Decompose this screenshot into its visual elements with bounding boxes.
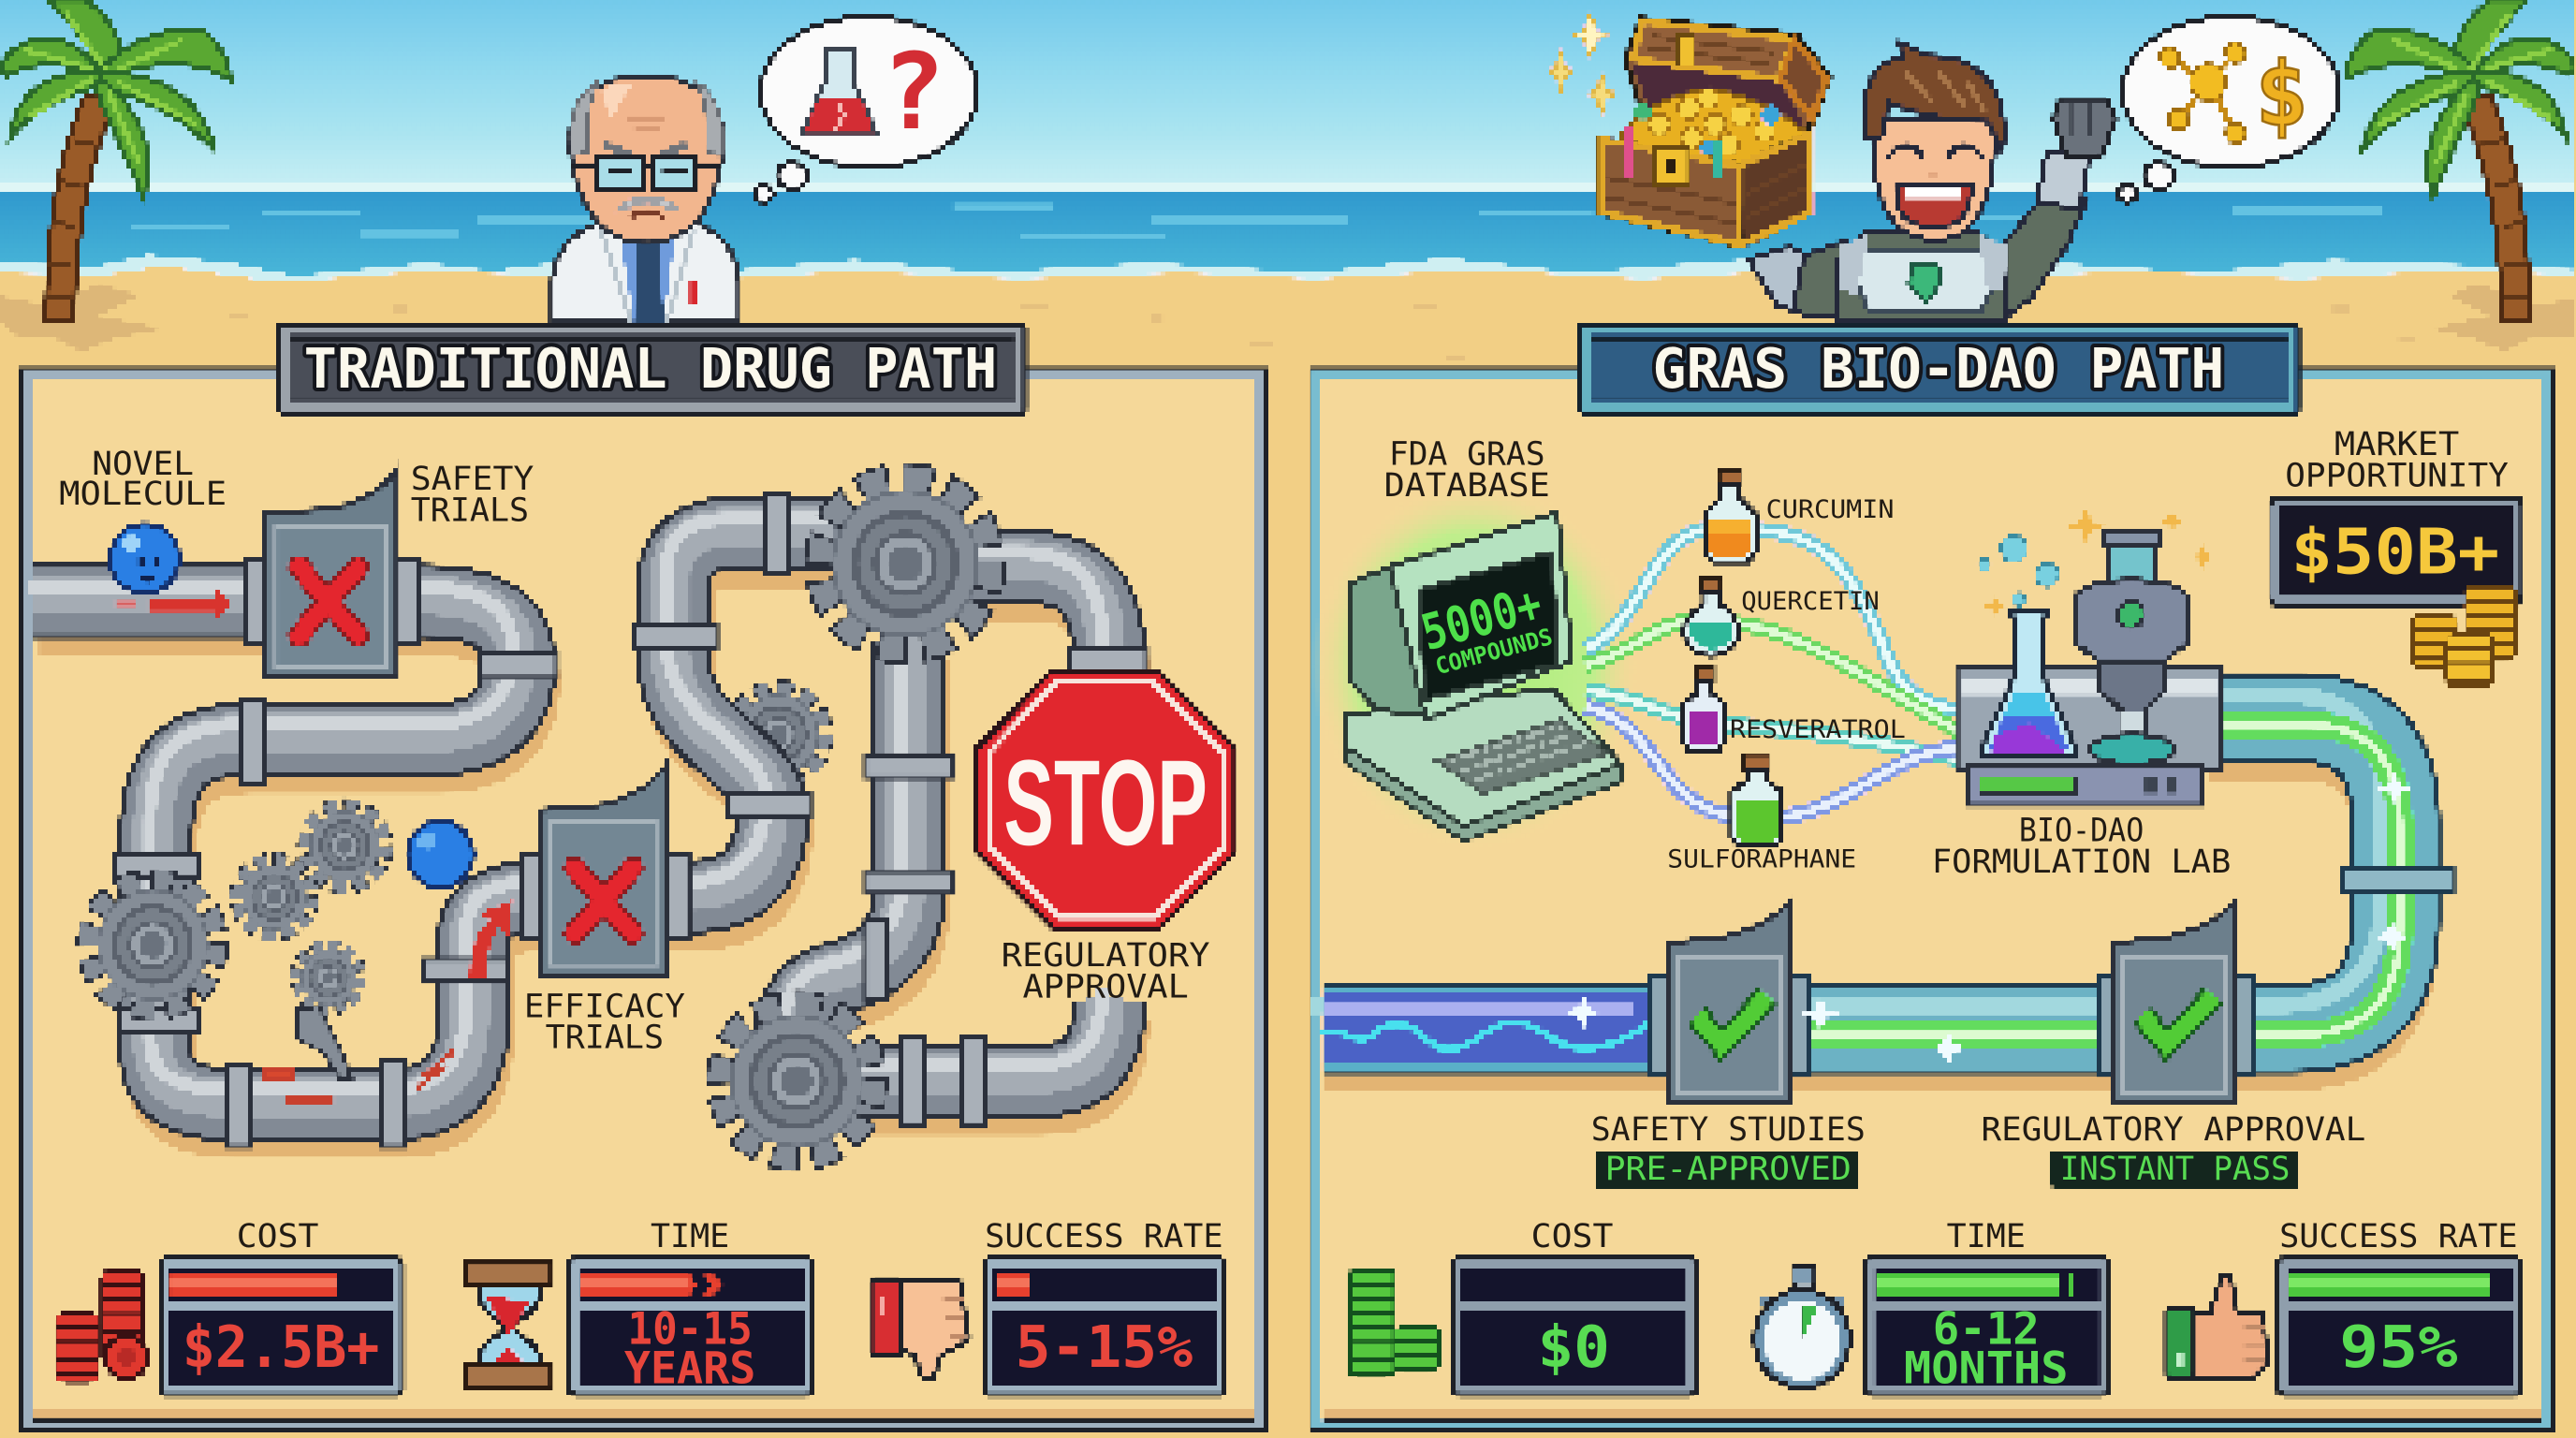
hero character: [1748, 43, 2115, 322]
pipe flanges: [115, 492, 1147, 1147]
compound labels: CURCUMIN: [1766, 496, 1895, 524]
icon: thumbs up: [2167, 1277, 2267, 1377]
regulatory approval gate with check: [2115, 901, 2236, 1104]
compound labels: QUERCETIN: [1741, 588, 1880, 616]
label: formulation lab: BIO-DAO: [2019, 812, 2144, 850]
efficacy trials gate with X: [542, 766, 666, 975]
metric: traditional time: YEARS: [624, 1343, 755, 1395]
label: novel molecule: MOLECULE: [59, 475, 227, 513]
success bar: [996, 1273, 1029, 1297]
metric: GRAS time: MONTHS: [1904, 1343, 2069, 1395]
label: FDA GRAS database: DATABASE: [1384, 466, 1550, 505]
metric: traditional cost: $2.5B+: [183, 1314, 379, 1381]
vial: resveratrol: [1684, 668, 1723, 753]
machine column: [2109, 533, 2154, 588]
label: FDA GRAS database: [1384, 435, 1550, 505]
screen: 5000+ compounds: [1415, 575, 1556, 681]
bar highlights: [171, 1280, 1029, 1288]
label: market opportunity: OPPORTUNITY: [2285, 456, 2509, 494]
treasure chest: [1600, 18, 1830, 246]
metric: GRAS time: 6-12: [1933, 1304, 2040, 1356]
bubbles: [1979, 536, 2058, 607]
compound labels: [1667, 496, 1906, 874]
label: safety trials: TRIALS: [411, 491, 529, 529]
energy section: [1323, 988, 1654, 1070]
label: efficacy trials: EFFICACY: [524, 987, 685, 1025]
time bar: [581, 1273, 723, 1297]
tangled pipeline: [28, 492, 1147, 1147]
gold sparkles: [1983, 506, 2216, 621]
label: novel molecule: [59, 445, 227, 513]
failed molecule: [407, 822, 473, 888]
lab machine: [1956, 506, 2223, 805]
metric: traditional success rate: SUCCESS RATE: [985, 1217, 1223, 1255]
metric frames: GRAS: [1454, 1258, 2520, 1395]
metric: GRAS cost: $0: [1538, 1314, 1610, 1381]
sparkles: [1547, 13, 1617, 115]
market opportunity display: [2270, 498, 2522, 605]
heading plate: traditional: [279, 324, 1025, 414]
GRAS pipeline: [1310, 695, 2452, 1077]
compound labels: RESVERATROL: [1730, 716, 1906, 744]
heading: GRAS: GRAS BIO-DAO PATH: [1653, 336, 2224, 401]
stop text: STOP: [1003, 734, 1208, 871]
bar highlights: [1878, 1278, 2489, 1286]
stop sign: [977, 670, 1236, 929]
metric: GRAS time: TIME: [1947, 1217, 2026, 1255]
label: FDA GRAS database: FDA GRAS: [1389, 435, 1545, 474]
screen: 5000+ compounds: COMPOUNDS: [1432, 623, 1556, 680]
label: regulatory approval: REGULATORY: [1002, 936, 1210, 975]
chest lid: [1625, 18, 1830, 165]
metric frames: traditional: [161, 1258, 1225, 1395]
label: market opportunity: [2285, 425, 2509, 494]
metric: traditional time: TIME: [651, 1217, 729, 1255]
metric: traditional success rate: 5-15%: [1016, 1314, 1193, 1381]
label: regulatory approval: APPROVAL: [1022, 967, 1189, 1005]
novel molecule: [110, 524, 179, 594]
icon: thumbs down: [871, 1278, 969, 1380]
metric: traditional success rate: [985, 1217, 1223, 1381]
panel: traditional drug path frame: [23, 370, 1265, 1431]
scientist character: [552, 76, 739, 322]
vial: sulforaphane: [1732, 755, 1782, 846]
metric: GRAS cost: [1531, 1217, 1613, 1381]
vial: quercetin: [1684, 577, 1738, 655]
label: efficacy trials: [524, 987, 685, 1057]
icon: stopwatch: [1754, 1267, 1850, 1388]
time bar: [1878, 1273, 2075, 1297]
metric: GRAS success rate: SUCCESS RATE: [2279, 1217, 2518, 1255]
red curved arrow: [470, 901, 513, 979]
icon: red coin stacks: [54, 1269, 148, 1384]
screen: 5000+ compounds: 5000+: [1415, 576, 1548, 662]
label: safety trials: [411, 460, 534, 529]
metric: traditional time: 10-15: [627, 1304, 753, 1356]
icon: green coin stacks: [1347, 1267, 1441, 1378]
label: formulation lab: FORMULATION LAB: [1932, 843, 2231, 881]
question mark: ?: [882, 32, 945, 154]
label: regulatory approval: [1002, 936, 1210, 1005]
metric: traditional cost: COST: [237, 1217, 318, 1255]
metric: traditional cost: [183, 1217, 379, 1381]
label: novel molecule: NOVEL: [92, 445, 194, 483]
gears: [91, 481, 988, 1155]
red cracks: [263, 1051, 453, 1104]
cost bar: [171, 1273, 335, 1297]
value: $50B+: $50B+: [2291, 515, 2499, 588]
compound tubes: [1586, 529, 1958, 818]
badge: pre-approved: PRE-APPROVED: [1605, 1150, 1852, 1188]
metric: GRAS success rate: 95%: [2339, 1314, 2457, 1381]
broken gear behind pipe: [734, 690, 823, 779]
red arrow in pipe: [115, 587, 231, 623]
label: regulatory approval: REGULATORY APPROVAL: [1982, 1110, 2365, 1149]
glowing computer: [1310, 481, 1639, 849]
metric: traditional time: [624, 1217, 755, 1395]
label: formulation lab: [1932, 812, 2231, 881]
palm tree right: [2346, 0, 2576, 322]
vial: curcumin: [1705, 470, 1756, 562]
heading: traditional: TRADITIONAL DRUG PATH: [304, 336, 997, 401]
label: safety trials: SAFETY: [411, 460, 534, 498]
thought bubble: flask and question mark: [754, 17, 977, 202]
thought bubble: molecule and dollar: [2118, 17, 2339, 202]
icon: gold coin stacks: [2410, 583, 2517, 688]
metric: GRAS cost: COST: [1531, 1217, 1613, 1255]
label: efficacy trials: TRIALS: [546, 1019, 664, 1057]
label: safety studies: SAFETY STUDIES: [1591, 1110, 1866, 1149]
label: market opportunity: MARKET: [2334, 425, 2459, 463]
gold pile: [1617, 89, 1807, 168]
compound labels: SULFORAPHANE: [1667, 846, 1856, 874]
success bar: [2290, 1273, 2489, 1297]
safety trials gate with X: [266, 468, 398, 677]
safety studies gate with check: [1669, 901, 1791, 1104]
metric: GRAS time: [1904, 1217, 2069, 1395]
badge: instant pass: INSTANT PASS: [2060, 1150, 2290, 1188]
icon: hourglass: [466, 1264, 552, 1388]
panel: GRAS bio-DAO path frame: [1310, 370, 2553, 1431]
status badges: [1595, 1150, 2300, 1188]
heading plate: GRAS: [1580, 324, 2298, 414]
dollar sign: $: [2255, 43, 2308, 146]
metric: GRAS success rate: [2279, 1217, 2518, 1381]
palm tree left: [0, 0, 230, 322]
glowing flask: [1981, 611, 2076, 757]
chest body: [1600, 138, 1740, 246]
